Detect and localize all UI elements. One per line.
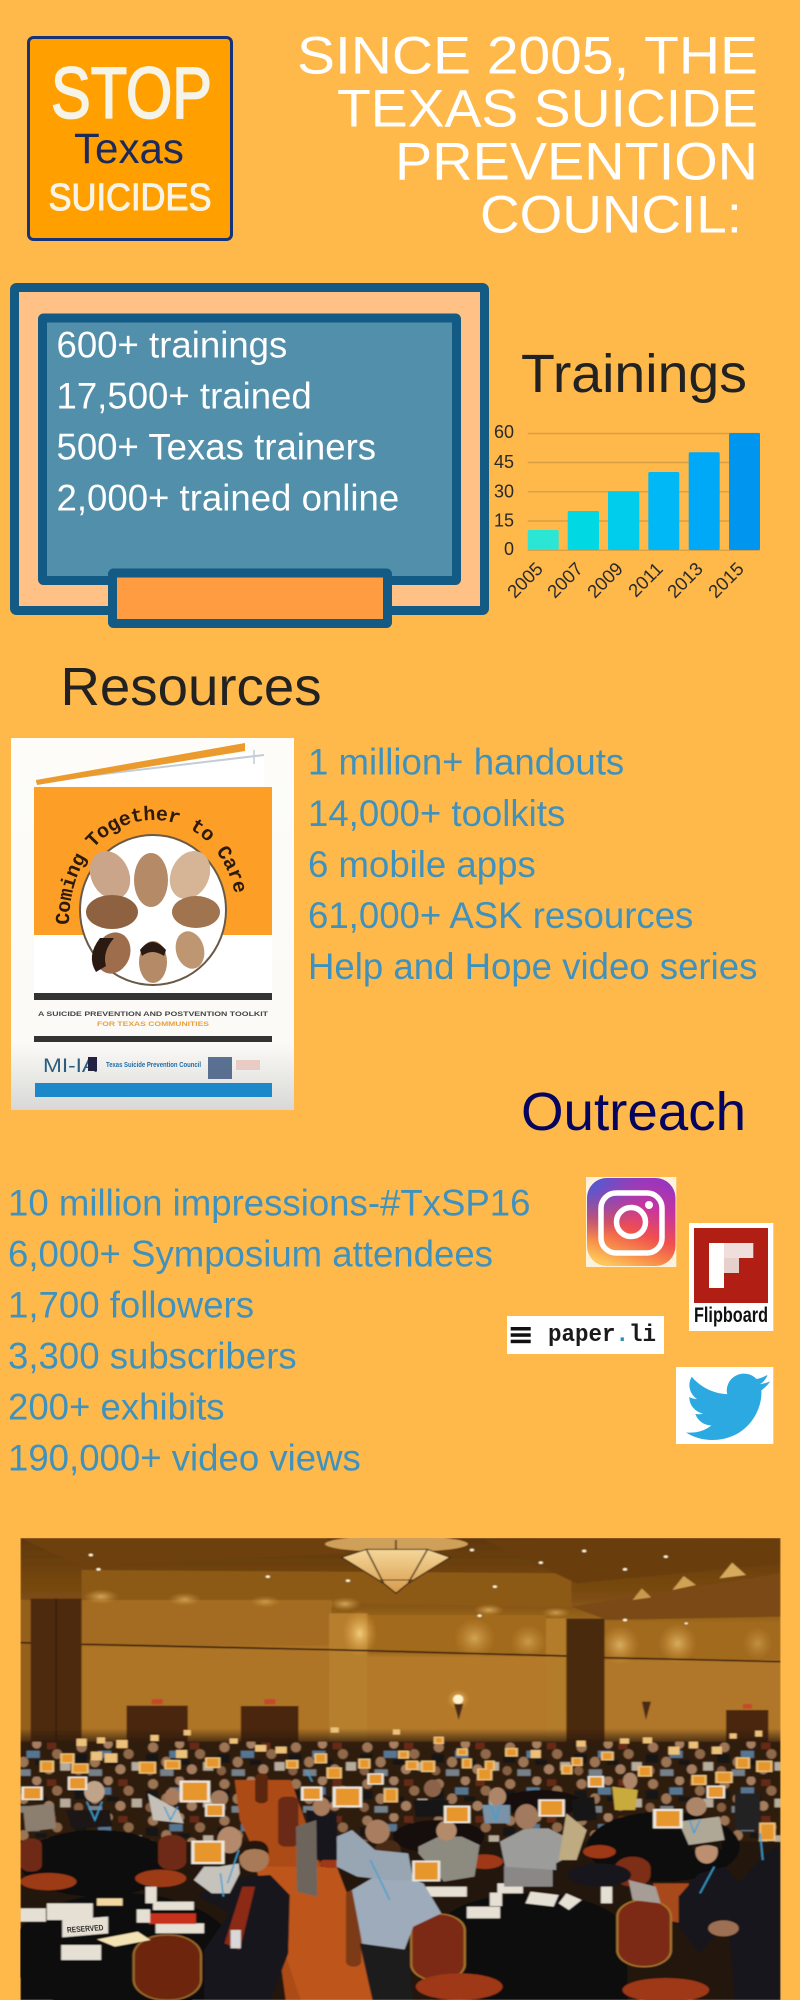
resources list: 1 million+ handouts	[308, 742, 624, 782]
heading: Trainings: Trainings	[521, 344, 747, 404]
bar chart: trainings by year: 2013	[663, 558, 707, 602]
trainings stats: 600+ trainings	[56, 324, 287, 366]
trainings stats: 17,500+ trained	[56, 376, 312, 416]
outreach list: 1,700 followers	[8, 1284, 254, 1326]
icon: Instagram	[586, 1177, 676, 1267]
logo: Stop Texas Suicides: STOP	[51, 54, 212, 134]
laptop and bag	[504, 1866, 553, 1887]
chairs	[20, 1773, 709, 2000]
bar chart: trainings by year: 2007	[543, 558, 587, 602]
icon: Flipboard	[689, 1223, 773, 1331]
place card: RESERVED	[66, 1924, 105, 1935]
title	[297, 26, 758, 245]
wall panels	[82, 1600, 332, 1645]
trainings stats	[56, 324, 399, 518]
resources list	[308, 742, 757, 987]
columns	[31, 1599, 82, 1762]
resources list: Help and Hope video series	[308, 946, 757, 987]
heading: Resources: Resources	[60, 657, 322, 717]
toolkit cover image: Texas Suicide Prevention Council	[106, 1062, 201, 1069]
signs: orange fronts	[24, 1738, 773, 1880]
bar chart: trainings by year: 2009	[583, 558, 627, 602]
sconces	[449, 1691, 468, 1706]
foreground table papers	[20, 1883, 612, 1960]
bar chart: trainings by year: 2011	[624, 558, 667, 601]
resources list: 6 mobile apps	[308, 844, 536, 885]
toolkit cover image	[11, 738, 294, 1110]
title: COUNCIL:	[480, 186, 742, 245]
trainings stats: 2,000+ trained online	[56, 478, 399, 518]
title: TEXAS SUICIDE	[337, 80, 758, 138]
signs: pale backing, small	[40, 1727, 776, 1841]
outreach list: 3,300 subscribers	[8, 1336, 297, 1376]
toolkit cover image: FOR TEXAS COMMUNITIES	[97, 1021, 210, 1028]
toolkit cover image: Coming Together to Care	[56, 806, 244, 924]
icon: Flipboard: Flipboard	[694, 1304, 768, 1327]
doors	[127, 1706, 188, 1747]
chandelier	[342, 1549, 450, 1593]
bar chart: trainings by year: 2015	[704, 558, 748, 602]
foreground people	[23, 1773, 781, 2000]
logo: Stop Texas Suicides: SUICIDES	[48, 177, 212, 219]
outreach list: 200+ exhibits	[8, 1386, 225, 1428]
bar chart: trainings by year: 0	[504, 539, 514, 559]
photo: conference attendees holding signs	[10, 1536, 781, 2000]
bar chart: trainings by year: 2005	[503, 558, 547, 602]
toolkit cover image: A SUICIDE PREVENTION AND POSTVENTION TOOLKIT	[38, 1011, 268, 1018]
toolkit title	[69, 820, 238, 925]
signs: white backing, large	[21, 1773, 725, 1881]
resources list: 61,000+ ASK resources	[308, 895, 693, 936]
tables	[20, 1830, 173, 1897]
bar chart: trainings by year	[494, 422, 760, 602]
panel: trainings board	[14, 288, 484, 624]
bar chart: trainings by year: 45	[494, 452, 514, 472]
bar chart: trainings by year: 30	[494, 482, 514, 502]
icon: paper.li	[507, 1316, 664, 1354]
outreach list	[8, 1182, 530, 1478]
ceiling spots	[89, 1549, 688, 1624]
title: PREVENTION	[395, 133, 758, 192]
faces	[82, 844, 220, 983]
logo: Stop Texas Suicides: Texas	[74, 125, 184, 173]
outreach list: 190,000+ video views	[8, 1438, 361, 1478]
trainings stats: 500+ Texas trainers	[56, 426, 376, 468]
crowd and floor base	[20, 1728, 781, 1753]
logo: Stop Texas Suicides	[28, 38, 232, 240]
heading: Outreach: Outreach	[521, 1082, 746, 1142]
resources list: 14,000+ toolkits	[308, 793, 565, 834]
outreach list: 6,000+ Symposium attendees	[8, 1234, 493, 1274]
lanyards	[87, 1770, 763, 1900]
outreach list: 10 million impressions-#TxSP16	[8, 1182, 530, 1224]
toolkit cover image: MI-IA	[43, 1056, 97, 1077]
bar chart: trainings by year: 15	[494, 511, 514, 531]
icon: paper.li: paper.li	[548, 1322, 656, 1349]
title: SINCE 2005, THE	[297, 26, 758, 86]
wall lights	[346, 1614, 374, 1652]
dado rails	[20, 1643, 566, 1656]
bar chart: trainings by year: 60	[494, 422, 514, 442]
icon: Twitter	[676, 1367, 773, 1444]
